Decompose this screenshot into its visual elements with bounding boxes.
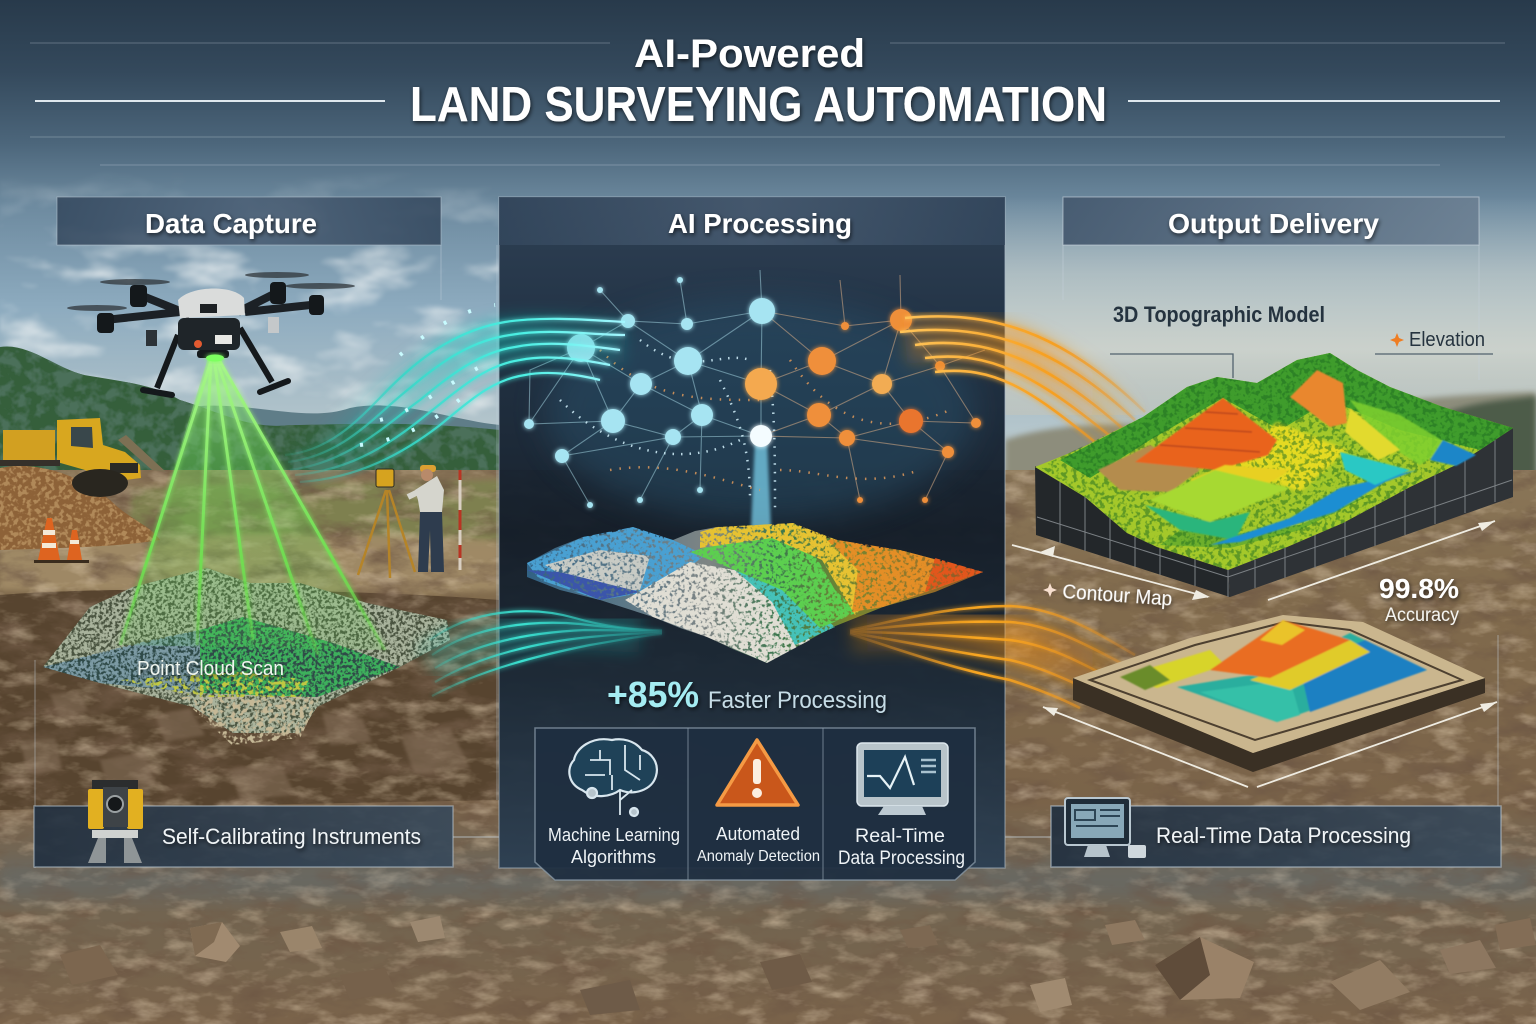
dirt light patches — [0, 470, 1536, 1024]
feature: machine learning: Machine Learning — [548, 825, 680, 845]
dirt texture — [0, 470, 1536, 1024]
left panel heading: Data Capture — [145, 208, 317, 239]
label: 3d topographic model: 3D Topographic Model — [1113, 302, 1325, 327]
rotors — [67, 272, 355, 311]
accuracy stat — [1379, 573, 1459, 626]
front scan layer — [43, 617, 400, 697]
clouds — [0, 182, 499, 415]
orange lower stream lines — [850, 606, 1135, 708]
right panel heading: Output Delivery — [1168, 208, 1379, 239]
teal particles — [360, 305, 495, 445]
feature: anomaly detection — [697, 740, 820, 865]
3d topographic model — [1035, 353, 1513, 597]
model top surface — [1035, 353, 1513, 570]
feature: anomaly detection: Automated — [716, 824, 800, 844]
icon: computer — [1065, 798, 1146, 858]
center panel heading: AI Processing — [668, 208, 852, 239]
teal glow band — [285, 338, 625, 468]
terrace left — [1098, 445, 1200, 492]
right frame line — [1497, 635, 1499, 806]
cyan block — [1340, 452, 1410, 485]
orange glow band — [905, 338, 1125, 425]
feature: real-time data processing: Data Processing — [838, 848, 965, 869]
left panel frame — [35, 245, 497, 868]
vertical data beam — [751, 440, 771, 528]
label: elevation: Elevation — [1409, 329, 1485, 351]
label text: Self-Calibrating Instruments — [162, 824, 421, 849]
flow: orange lower stream — [850, 606, 1135, 708]
vegetation front — [1160, 490, 1380, 548]
marker: contour star — [1043, 583, 1057, 597]
white center node — [750, 425, 772, 447]
flow: teal lower stream — [430, 611, 662, 696]
mound speckle — [0, 466, 160, 550]
label text: Real-Time Data Processing — [1156, 823, 1411, 848]
flow: orange upper stream — [900, 316, 1145, 442]
center panel heading — [499, 197, 1005, 245]
blue nodes — [524, 277, 775, 508]
panel: data capture — [0, 197, 497, 868]
laser beams — [120, 358, 385, 655]
dimension arrow upper left — [1012, 545, 1210, 600]
yellow contours — [1225, 422, 1347, 492]
vegetation speckle — [1040, 353, 1513, 570]
stat: faster processing: Faster Processing — [708, 687, 887, 714]
teal base — [1145, 505, 1250, 540]
orange stream lines — [900, 316, 1145, 442]
surveyor with tripod — [358, 465, 460, 578]
traffic cones — [34, 518, 89, 563]
ground — [0, 470, 1536, 1024]
dimension arrow upper right — [1268, 521, 1495, 600]
teal lower stream lines — [430, 611, 662, 696]
brick trail — [180, 697, 320, 745]
model colour contours — [1098, 370, 1476, 545]
data dust — [600, 350, 950, 490]
icon: total station — [88, 780, 143, 863]
excavator — [0, 418, 166, 497]
tan site road left — [0, 533, 500, 594]
feature: machine learning: Algorithms — [571, 847, 656, 867]
model walls — [1035, 466, 1230, 597]
neural network — [524, 270, 985, 528]
dark pit left — [0, 590, 499, 810]
point cloud terrain — [527, 523, 983, 663]
icon: warning triangle — [717, 740, 798, 805]
label: contour map: Contour Map — [1062, 581, 1173, 611]
accuracy stat: 99.8% — [1379, 573, 1459, 604]
blue right — [1430, 440, 1476, 466]
feature bar: self-calibrating instruments — [34, 780, 453, 867]
panel: ai processing — [499, 197, 1005, 880]
title rule right — [1128, 100, 1500, 102]
feature: real-time data processing — [838, 743, 965, 869]
teal stream lines — [285, 319, 625, 482]
grassy zone left — [130, 480, 500, 545]
feature strip — [535, 728, 975, 880]
feature: real-time data processing: Real-Time — [855, 826, 945, 847]
distant blue hills — [170, 405, 500, 470]
left panel heading — [57, 197, 441, 245]
title line 2: LAND SURVEYING AUTOMATION — [410, 78, 1107, 132]
feature: anomaly detection: Anomaly Detection — [697, 848, 820, 865]
title block — [30, 32, 1505, 165]
title line 1: AI-Powered — [634, 32, 865, 76]
center glow — [545, 300, 975, 520]
stat: faster processing: +85% — [607, 674, 699, 715]
yellow block — [1190, 465, 1290, 488]
rubble left — [20, 690, 470, 800]
dark tree line right — [1440, 396, 1536, 478]
distant hills right — [1005, 392, 1536, 500]
drone — [67, 272, 355, 395]
title rule left — [35, 100, 385, 102]
second orange peak — [1290, 370, 1347, 427]
pale sky right — [1005, 197, 1536, 415]
green right slope — [1350, 400, 1450, 465]
point cloud mound — [43, 568, 450, 745]
light green lower pyramid — [1150, 470, 1290, 522]
label: point cloud scan: Point Cloud Scan — [137, 658, 284, 680]
feature bar: real-time data processing — [1051, 798, 1501, 867]
feature: machine learning — [548, 739, 680, 867]
right panel frame — [1063, 245, 1479, 380]
icon: monitor — [857, 743, 948, 815]
orange lower glow band — [850, 629, 1110, 675]
right panel heading — [1063, 197, 1479, 245]
connector lines between bars — [453, 836, 1051, 838]
vegetation back — [1060, 353, 1513, 478]
lower dimension arrow left — [1043, 707, 1248, 787]
icon: brain — [569, 739, 657, 816]
leader lines — [1110, 354, 1493, 378]
teal lower glow band — [430, 629, 640, 665]
lower dimension arrow right — [1257, 702, 1497, 787]
forest left — [0, 346, 500, 490]
flow: teal upper stream — [285, 305, 625, 482]
orange nodes — [745, 309, 981, 503]
yellow right slope — [1345, 408, 1400, 460]
panel: output delivery — [1012, 197, 1513, 867]
accuracy stat: Accuracy — [1385, 605, 1459, 626]
band below panels — [0, 862, 1536, 900]
contour map slab — [1073, 615, 1485, 772]
blue river — [1210, 470, 1417, 545]
foreground rocks — [60, 916, 1536, 1015]
stat: faster processing — [607, 674, 887, 715]
orange peak main — [1135, 398, 1277, 470]
dirt mound — [0, 466, 160, 550]
